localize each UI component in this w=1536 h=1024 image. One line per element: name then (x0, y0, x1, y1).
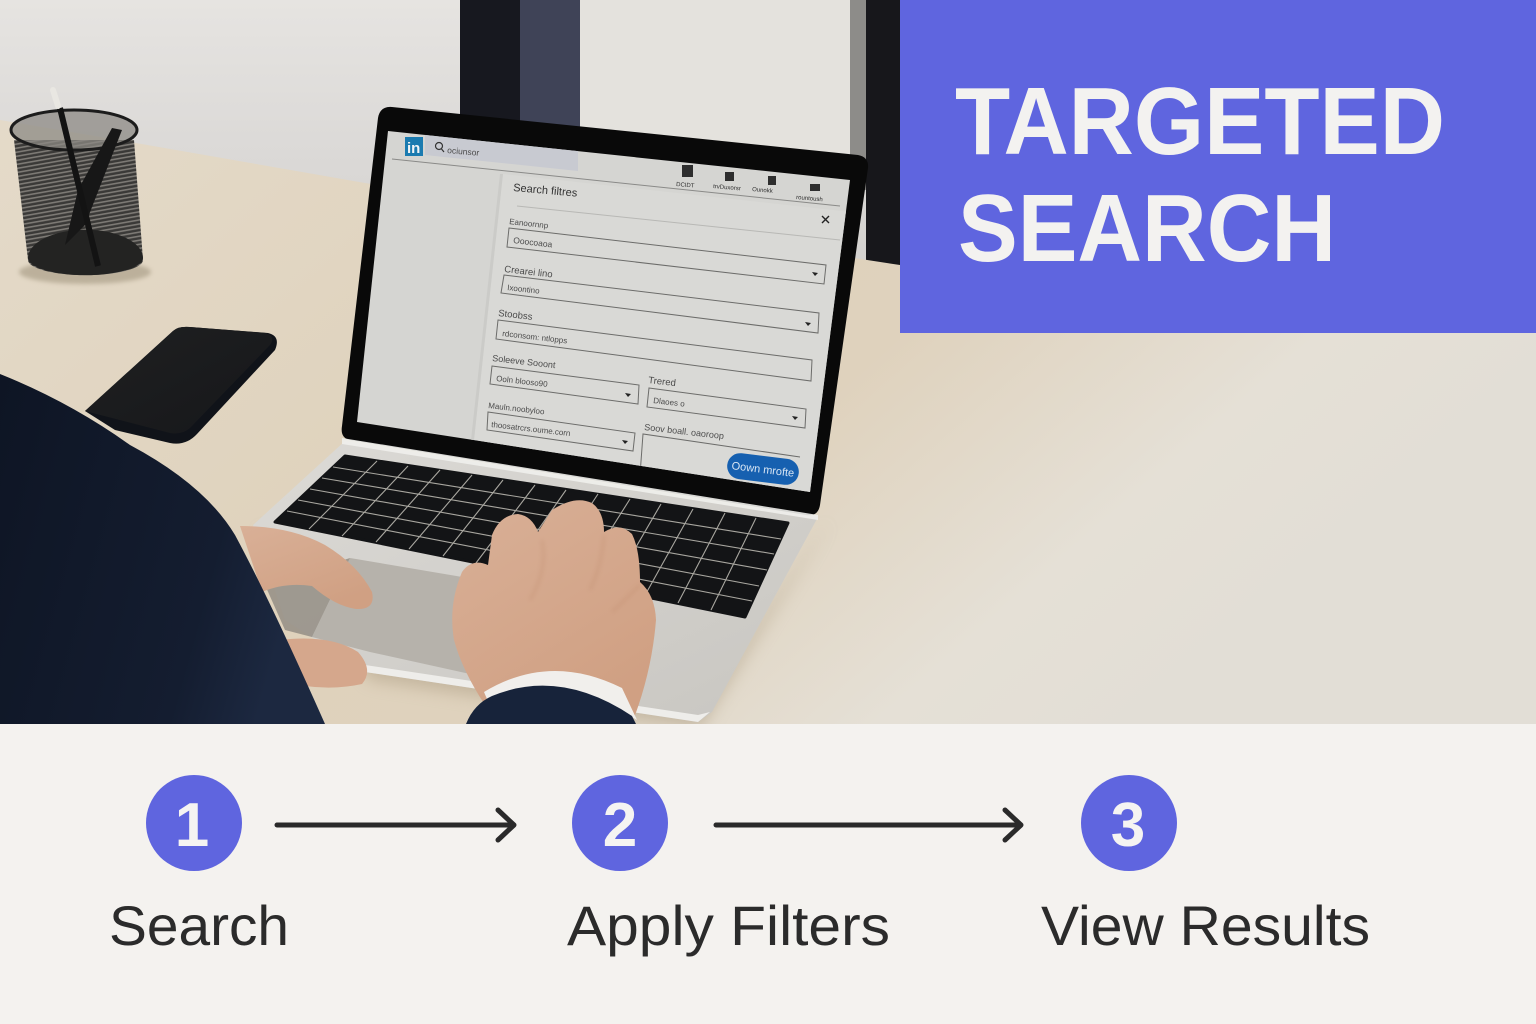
trackpad (265, 558, 480, 674)
form fields (487, 228, 826, 475)
field labels and values: Ooocoaoa (513, 235, 553, 249)
field labels and values: Eanoornnp (509, 217, 549, 230)
laptop screen: search filters form (357, 130, 870, 500)
jacket sleeve right (466, 686, 636, 724)
photo: person using laptop at desk (0, 0, 1536, 730)
nav icons: Ounokk (752, 187, 774, 195)
nav icons: trvDuxorsr (713, 184, 741, 192)
field labels and values: rdconsom: ntlopps (502, 329, 568, 345)
filters heading: Search filtres (513, 182, 578, 200)
jacket shoulder and arm (0, 374, 325, 724)
LinkedIn badge (405, 137, 423, 157)
hinge edge (342, 438, 818, 520)
title text (955, 68, 1445, 282)
search bar (392, 130, 840, 206)
pencil cup (11, 90, 151, 284)
desk surface (0, 120, 1536, 724)
field labels and values: Soleeve Sooont (492, 353, 557, 370)
field labels and values: Mauln.noobyloo (488, 401, 545, 416)
field labels and values: Soov boall. oaoroop (644, 422, 724, 441)
close icon (822, 216, 829, 223)
step 2: apply filters: Apply Filters (567, 894, 890, 957)
field labels and values: Ixoontino (507, 283, 541, 296)
filter panel (474, 212, 846, 492)
laptop shadow (260, 520, 830, 730)
field labels and values (488, 217, 724, 441)
step 3: view results: 3 (1111, 791, 1145, 860)
field labels and values: Trered (648, 375, 676, 389)
title text: SEARCH (958, 175, 1336, 282)
nav icons: DCIDT (676, 182, 695, 190)
smartphone (85, 327, 277, 444)
window and frame (460, 0, 900, 270)
dropdown arrows (622, 272, 818, 444)
step 3: view results: View Results (1041, 894, 1370, 957)
background wall (0, 0, 900, 280)
step 1: search (109, 775, 289, 957)
confirm button (727, 453, 799, 485)
title banner (900, 0, 1536, 333)
nav icons: rountoush (796, 195, 823, 203)
field labels and values: Stoobss (498, 308, 533, 323)
steps panel (0, 724, 1536, 1024)
title text: TARGETED (955, 68, 1445, 175)
step 1: search: 1 (175, 791, 209, 860)
step 3: view results (1041, 775, 1370, 957)
pens (53, 90, 122, 266)
shirt cuff (484, 671, 637, 720)
search bar: ociunsor (447, 145, 480, 158)
field labels and values: thoosatrcrs.oume.corn (491, 420, 571, 438)
step 2: apply filters (567, 775, 890, 957)
screen bezel (342, 107, 868, 515)
laptop (253, 107, 870, 730)
left hand fingers (240, 526, 373, 688)
laptop base (253, 441, 818, 722)
arrow 2 (716, 810, 1021, 840)
keyboard (275, 456, 788, 617)
nav icons (676, 165, 823, 203)
right hand on keyboard (452, 500, 656, 718)
step 2: apply filters: 2 (603, 791, 637, 860)
arrow 1 (277, 810, 514, 840)
field labels and values: Crearei lino (504, 264, 553, 280)
LinkedIn badge: in (407, 140, 420, 157)
step 1: search: Search (109, 894, 289, 957)
confirm button: Oown mrofte (731, 460, 795, 480)
field labels and values: Dlaoes o (653, 396, 686, 409)
field labels and values: Ooln blooso90 (496, 374, 549, 389)
